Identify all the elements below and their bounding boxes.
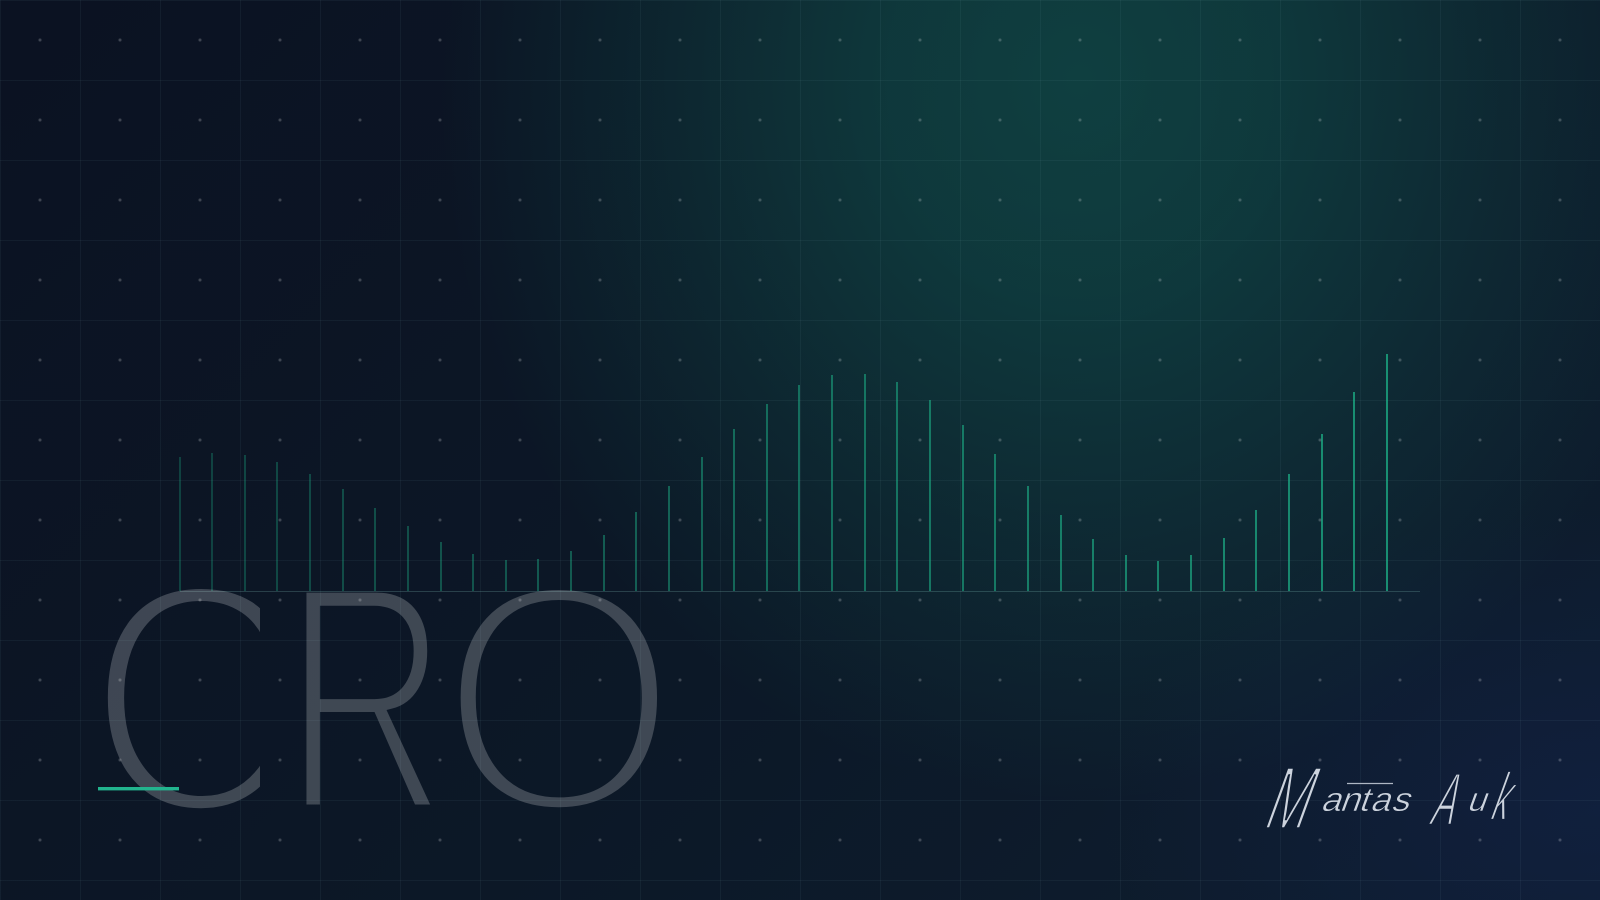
title: CRO: R — [284, 518, 448, 880]
accent underline — [98, 787, 179, 790]
signature: Mantas Auk: M — [1254, 748, 1333, 849]
title: CRO: O — [439, 516, 679, 882]
bar chart — [180, 354, 1420, 592]
signature: Mantas Auk: A — [1422, 758, 1475, 842]
signature: Mantas Auk: u — [1463, 781, 1496, 819]
signature: Mantas Auk: k — [1483, 759, 1528, 834]
title: CRO: C — [87, 516, 300, 882]
signature: Mantas Auk: antas — [1317, 780, 1420, 819]
signature: Mantas Auk — [1266, 768, 1516, 828]
main drawing — [98, 354, 1516, 828]
title: CRO — [108, 589, 657, 808]
